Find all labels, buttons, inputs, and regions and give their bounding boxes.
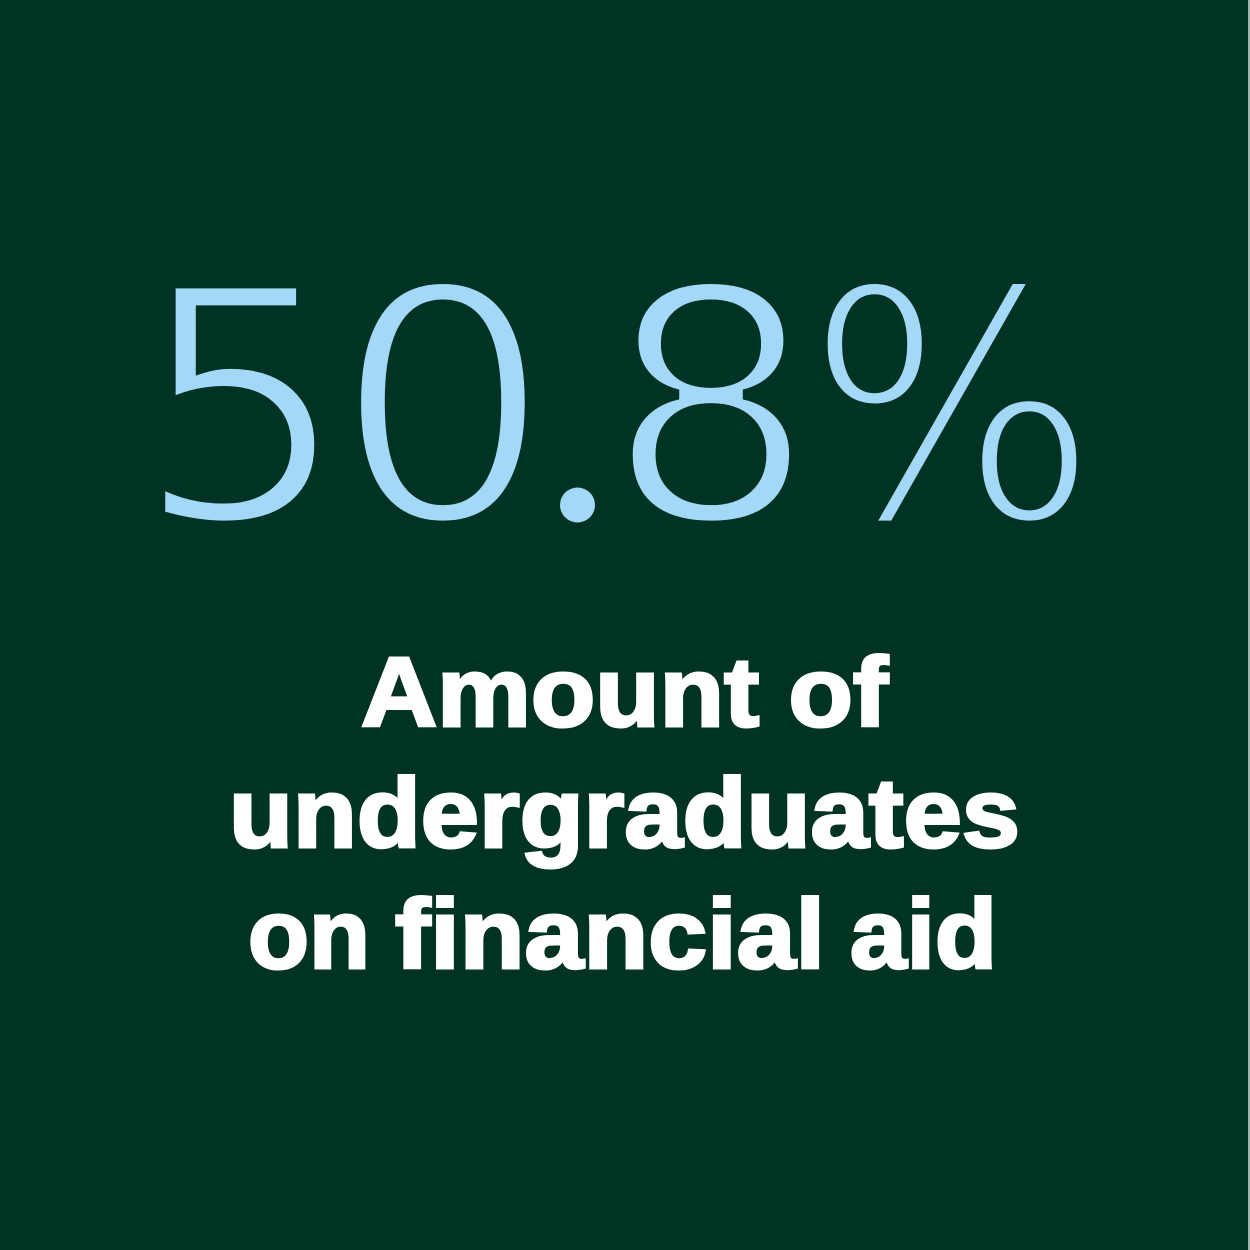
caption: Amount of undergraduates on financial aid: aid	[850, 879, 997, 989]
statistic: 50.8%: %	[806, 218, 1098, 598]
caption: Amount of undergraduates on financial aid: financial	[395, 879, 825, 989]
caption: Amount of undergraduates on financial aid: undergraduates	[229, 758, 1020, 868]
caption: Amount of undergraduates on financial aid: on	[248, 879, 370, 989]
caption: Amount of undergraduates on financial aid	[229, 637, 1020, 989]
statistic: 50.8%	[134, 218, 1098, 598]
statistic: 50.8%: 0	[333, 218, 553, 598]
caption: Amount of undergraduates on financial aid: Amount of	[361, 637, 888, 747]
statistic: 50.8%: .	[553, 376, 601, 550]
statistic: 50.8%: 5	[134, 218, 349, 598]
statistic: 50.8%: 8	[605, 218, 817, 598]
